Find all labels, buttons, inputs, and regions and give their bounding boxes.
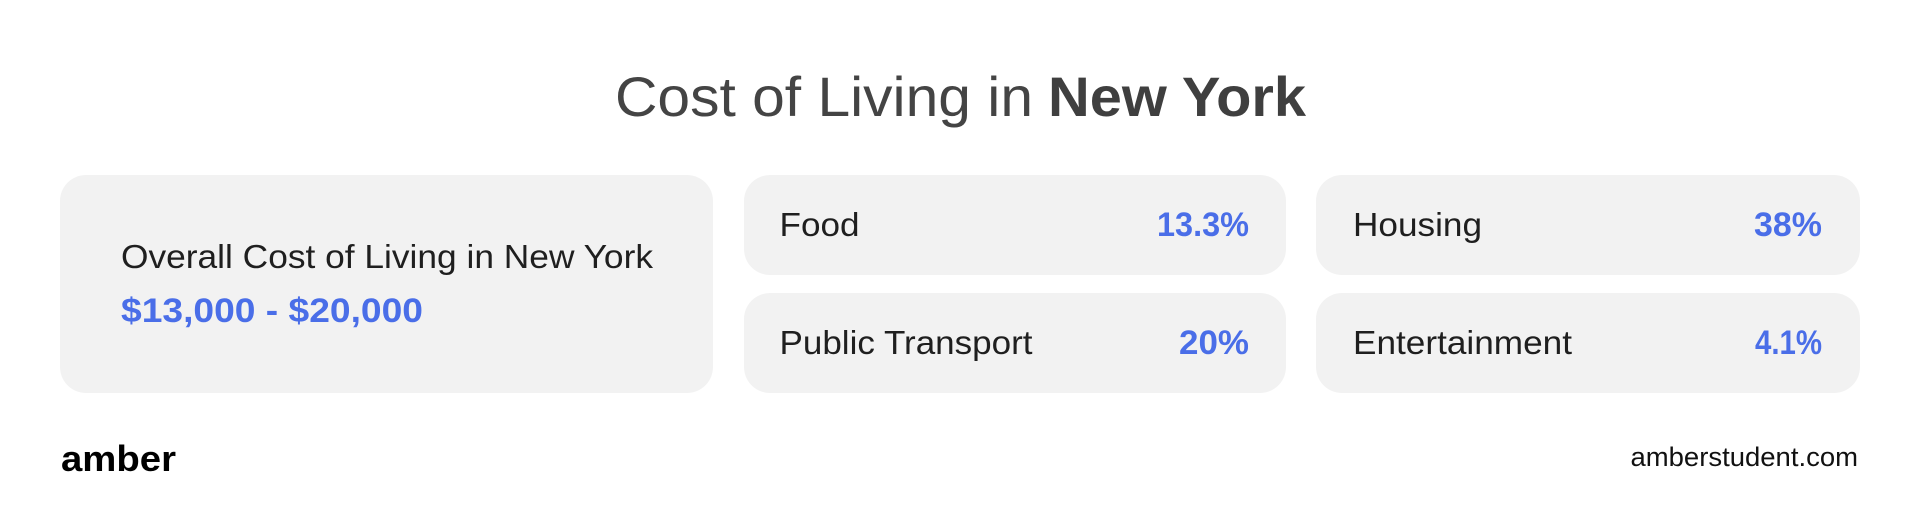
panel: food: Food <box>780 206 860 243</box>
panel: food: 13.3% <box>1157 206 1249 244</box>
panel: public transport: Public Transport <box>780 324 1032 361</box>
logo: amber: amber <box>61 438 176 479</box>
website url: amberstudent.com <box>1630 442 1858 472</box>
panel: public transport <box>744 293 1286 393</box>
panel: entertainment: 4.1% <box>1755 324 1822 362</box>
panel: housing: 38% <box>1754 206 1822 244</box>
panel: public transport: 20% <box>1179 324 1249 362</box>
title: Cost of Living in <box>615 65 1033 128</box>
panel: overall cost of living: $13,000 - $20,000 <box>121 292 423 330</box>
panel: entertainment: Entertainment <box>1353 324 1572 361</box>
panel: housing <box>1316 175 1860 275</box>
panel: housing: Housing <box>1353 206 1482 243</box>
panel: overall cost of living: Overall Cost of Living in New York <box>121 238 654 275</box>
title: New York <box>1048 65 1307 128</box>
panel: entertainment <box>1316 293 1860 393</box>
title <box>615 65 1307 128</box>
panel: overall cost of living <box>60 175 713 393</box>
panel: food <box>744 175 1286 275</box>
